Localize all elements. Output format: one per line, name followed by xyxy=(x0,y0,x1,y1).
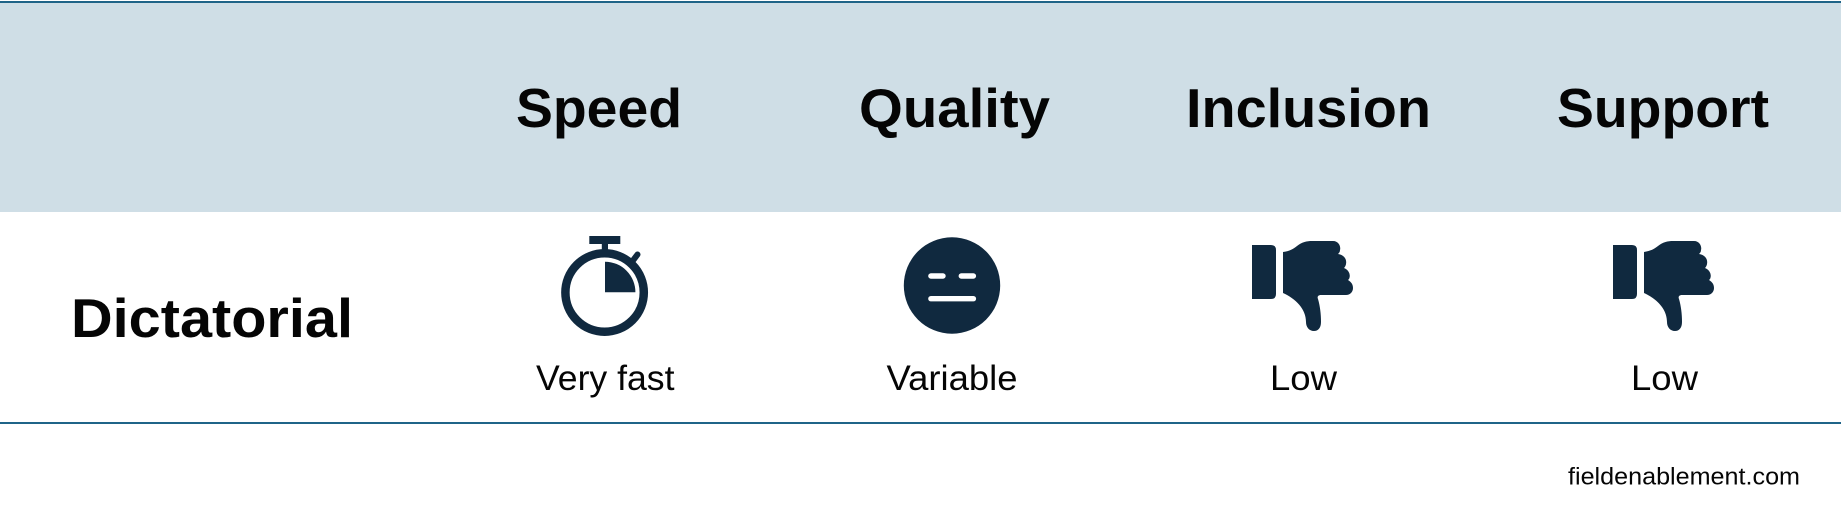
label: Very fast: Very fast xyxy=(536,359,675,398)
credit: fieldenablement.com: fieldenablement.com xyxy=(1568,464,1800,491)
row label: Dictatorial xyxy=(71,287,353,349)
heading: Speed: Speed xyxy=(516,77,682,139)
heading: Quality: Quality xyxy=(859,77,1050,139)
label: Low (Support): Low xyxy=(1631,359,1699,398)
heading: Inclusion: Inclusion xyxy=(1186,77,1431,139)
icon: thumbs down (Inclusion) xyxy=(1252,241,1353,331)
heading: Support: Support xyxy=(1557,77,1769,139)
label: Low (Inclusion): Low xyxy=(1270,359,1338,398)
row: Dictatorial xyxy=(71,236,1714,398)
icon: neutral face xyxy=(904,237,1000,334)
icon: stopwatch xyxy=(565,236,644,332)
header band xyxy=(0,1,1841,212)
icon: thumbs down (Support) xyxy=(1613,241,1714,331)
label: Variable: Variable xyxy=(886,359,1018,398)
